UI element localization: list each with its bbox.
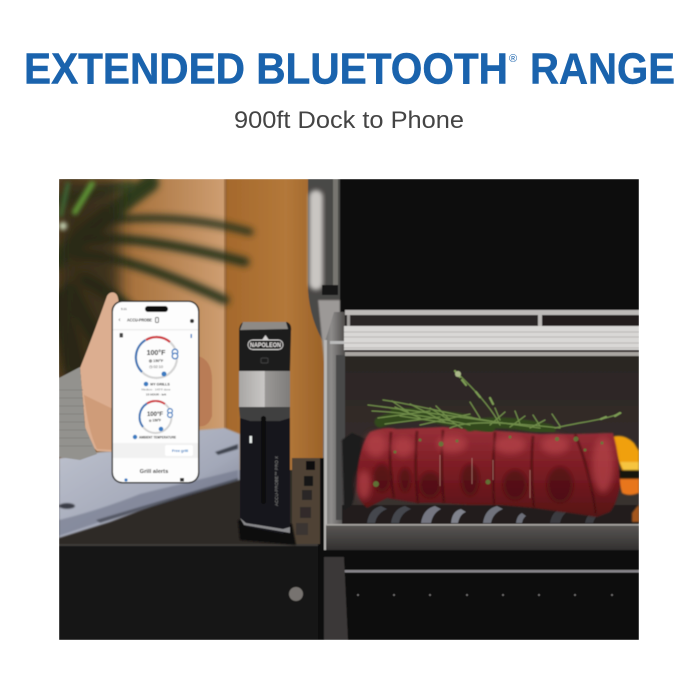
lower left post [320, 557, 348, 640]
probe one label: 15 HOUR · left [146, 392, 166, 396]
warming rack top rail [345, 310, 639, 326]
dock shadow [238, 520, 296, 545]
blurred plant [59, 183, 250, 370]
header back arrow: ‹ [118, 318, 120, 324]
vent dots [357, 594, 613, 596]
phone app header: ACCU-PROBE [127, 318, 152, 322]
grill alerts text: Grill alerts [140, 469, 168, 475]
probe gauge one [136, 337, 178, 378]
phone app panel shade [113, 329, 198, 330]
settings dot [190, 319, 194, 323]
ambient temperature label: AMBIENT TEMPERATURE [139, 436, 177, 440]
warming rack [330, 326, 639, 356]
probe gauge two: ◎ 150°F [149, 418, 161, 422]
dock button [261, 358, 268, 363]
grill tray front [326, 524, 639, 550]
hand [80, 292, 212, 452]
dock steel collar [239, 407, 290, 421]
dock steel middle [239, 371, 290, 407]
grill grates [342, 433, 639, 525]
shelf control buttons [292, 458, 320, 544]
phone bottom icons [124, 478, 184, 482]
meat roast [357, 427, 620, 517]
photo panel [59, 179, 639, 640]
ambient temperature label [133, 435, 177, 440]
lid dark background [338, 179, 639, 311]
probe one label: Medium · 145°F done [142, 388, 171, 392]
probe gauge one: 100°F [147, 349, 166, 357]
grill back wall [342, 312, 639, 527]
dock lower body [240, 415, 290, 534]
grill left frame [322, 312, 345, 560]
dock base [240, 518, 290, 533]
phone status clock: 5:21 [121, 307, 127, 311]
side shelf counter [59, 458, 324, 640]
wood backdrop [59, 179, 639, 640]
smartphone [112, 300, 200, 484]
grilled peppers [612, 436, 639, 522]
sweater sleeve [59, 367, 97, 460]
lower rail [344, 570, 639, 572]
grill button band [113, 443, 198, 458]
grill button band: Free grill [172, 449, 188, 453]
probe dock [238, 322, 296, 545]
dock side text: ACCU-PROBE™ PRO X [274, 456, 279, 506]
stored probe [261, 416, 266, 504]
title: EXTENDED BLUETOOTH [24, 46, 508, 94]
probe card icons [120, 333, 192, 338]
herb sprigs [368, 371, 621, 430]
napoleon logo: NAPOLEON [250, 343, 281, 349]
registered mark: ® [509, 53, 517, 65]
probe one label: MY GRILLS [150, 382, 170, 386]
towel [59, 428, 240, 538]
probe gauge one: ◷ 02:10 [149, 365, 163, 369]
bright leaf highlights [59, 184, 92, 230]
grill lower black band [322, 550, 639, 640]
napoleon logo [248, 335, 283, 350]
dock top head [239, 322, 291, 371]
phone dynamic island [145, 306, 168, 312]
subtitle: 900ft Dock to Phone [234, 107, 464, 134]
probe gauge two: 100°F [147, 412, 163, 418]
plant dark mass [59, 179, 119, 379]
dock indicator light [250, 436, 252, 443]
title end: RANGE [530, 46, 675, 94]
header probe icon [156, 318, 158, 322]
lid side frame [308, 179, 340, 375]
probe one label [142, 382, 171, 396]
dock cap highlight [240, 322, 288, 330]
probe gauge two [140, 401, 172, 433]
probe gauge one: ◎ 150°F [149, 359, 164, 363]
